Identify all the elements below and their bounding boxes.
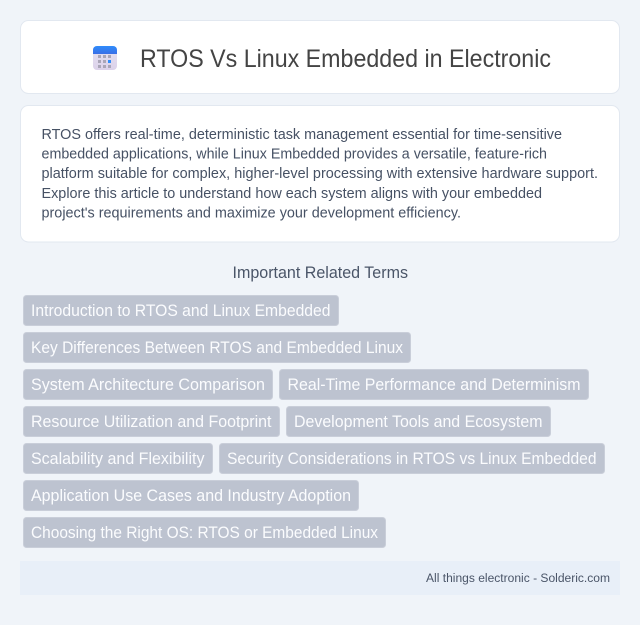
tag: scalability: Scalability and Flexibility xyxy=(31,450,205,468)
text block: description: Explore this article to understand how each system aligns with your embedded xyxy=(42,186,542,202)
tag: security xyxy=(220,444,604,474)
footer xyxy=(20,561,620,595)
tag: development tools: Development Tools and Ecosystem xyxy=(294,413,542,431)
tag: introduction xyxy=(24,296,338,326)
tag: resource utilization: Resource Utilization and Footprint xyxy=(31,413,272,431)
tag: real-time performance: Real-Time Performance and Determinism xyxy=(288,376,580,394)
tag: choosing the right os: Choosing the Right OS: RTOS or Embedded Linux xyxy=(31,524,378,542)
tag: development tools xyxy=(286,406,550,436)
tag: key differences xyxy=(24,332,410,362)
text block: description: RTOS offers real-time, deterministic task management essential for time-sensitive xyxy=(42,127,562,143)
icon: calendar xyxy=(93,46,117,70)
tag: introduction: Introduction to RTOS and Linux Embedded xyxy=(31,302,330,320)
tag: application use cases xyxy=(24,480,358,510)
tag: system architecture: System Architecture Comparison xyxy=(31,376,265,394)
text block: description xyxy=(42,127,598,221)
footer: All things electronic - Solderic.com xyxy=(426,571,610,585)
text block: description: platform suitable for complex, higher-level processing with extensive hardware support. xyxy=(42,166,598,182)
tag: application use cases: Application Use Cases and Industry Adoption xyxy=(31,487,351,505)
tag: real-time performance xyxy=(280,370,588,400)
panel: description xyxy=(20,106,620,242)
panel: header xyxy=(20,20,620,94)
tag: system architecture xyxy=(24,370,272,400)
tag list xyxy=(24,296,604,548)
heading: important related terms: Important Related Terms xyxy=(232,264,408,282)
tag: choosing the right os xyxy=(24,518,386,548)
tag: key differences: Key Differences Between RTOS and Embedded Linux xyxy=(31,339,403,357)
text block: description: embedded applications, while Linux Embedded provides a versatile, feature-rich xyxy=(42,147,547,163)
text block: description: project's requirements and maximize your development efficiency. xyxy=(42,205,461,221)
tag: scalability xyxy=(24,444,212,474)
title: RTOS Vs Linux Embedded in Electronic xyxy=(140,45,551,73)
tag: resource utilization xyxy=(24,406,280,436)
tag: security: Security Considerations in RTOS vs Linux Embedded xyxy=(227,450,596,468)
